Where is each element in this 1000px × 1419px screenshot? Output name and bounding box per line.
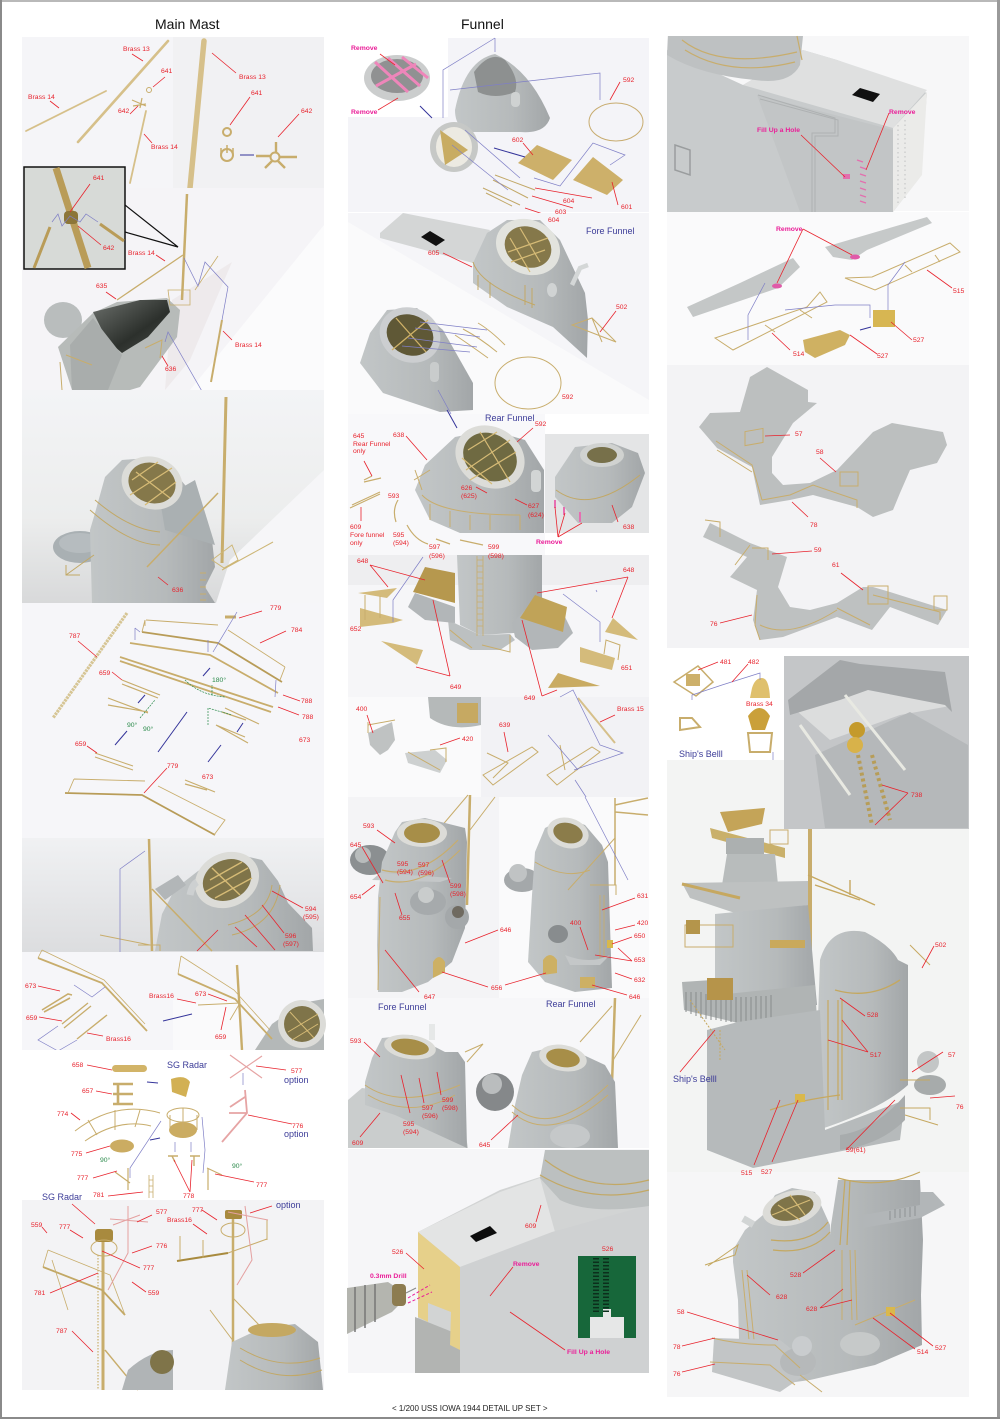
labels: Brass16	[167, 1217, 192, 1224]
labels: 599	[442, 1097, 454, 1104]
grey parts	[687, 217, 932, 317]
labels: 653	[634, 957, 646, 964]
labels: 609	[525, 1223, 537, 1230]
labels: Brass16	[106, 1036, 131, 1043]
labels: 788	[301, 698, 313, 705]
labels: 59	[814, 547, 822, 554]
brass grids	[715, 243, 960, 350]
labels: 400	[356, 706, 368, 713]
labels: Remove	[536, 539, 563, 546]
labels: 636	[165, 366, 177, 373]
labels: 625	[253, 952, 265, 959]
labels: (598)	[488, 553, 504, 560]
labels: 603	[555, 209, 567, 216]
labels: 593	[388, 493, 400, 500]
labels: Fore funnel	[350, 532, 385, 539]
labels: 592	[623, 77, 635, 84]
funnel and lower hull	[690, 931, 930, 1168]
labels: 626	[461, 485, 473, 492]
panel: masts complete	[22, 1192, 324, 1390]
funnel with rails	[414, 413, 544, 533]
labels: (598)	[442, 1105, 458, 1112]
labels: 651	[621, 665, 633, 672]
labels: 76	[673, 1371, 681, 1378]
labels: 559	[148, 1290, 160, 1297]
platform rails	[705, 428, 947, 640]
hull	[705, 1172, 945, 1392]
assembly arrows	[115, 612, 276, 762]
labels: 90°	[127, 721, 138, 729]
labels: 517	[870, 1052, 882, 1059]
brass plate 526	[418, 1232, 460, 1350]
tower	[682, 854, 875, 1023]
labels: 649	[524, 695, 536, 702]
funnel photo	[53, 397, 273, 603]
labels: 642	[301, 108, 313, 115]
panel: hull block with photo-etch and drill	[347, 1149, 649, 1373]
inset: mast detail: 641	[93, 175, 105, 182]
labels: 646	[500, 927, 512, 934]
upper platform	[699, 367, 947, 517]
labels: Fill Up a Hole	[567, 1349, 610, 1356]
labels: 514	[917, 1349, 929, 1356]
labels	[31, 1192, 301, 1335]
labels: 599	[488, 544, 500, 551]
brass platforms	[358, 567, 638, 688]
labels: Remove	[776, 226, 803, 233]
panel: tower and funnel assembled	[667, 760, 969, 1172]
panel: funnel rear assembled	[667, 1169, 969, 1397]
labels: 592	[562, 394, 574, 401]
labels: 515	[741, 1170, 753, 1177]
labels: SG Radar	[42, 1192, 82, 1202]
labels: 777	[256, 1182, 268, 1189]
labels: 657	[82, 1088, 94, 1095]
column	[408, 555, 573, 652]
labels: Brass 14	[151, 144, 178, 151]
labels: 654	[350, 894, 362, 901]
labels: (625)	[461, 493, 477, 500]
panel: rear funnel	[348, 410, 649, 555]
labels: 609	[352, 1140, 364, 1147]
labels: 777	[143, 1265, 155, 1272]
labels	[96, 250, 262, 373]
labels: 527	[877, 353, 889, 360]
labels: 595	[397, 861, 409, 868]
labels: 527	[913, 337, 925, 344]
brass stays	[38, 950, 272, 1050]
labels: 787	[69, 633, 81, 640]
panel: tower views	[348, 795, 649, 998]
labels	[350, 823, 649, 992]
labels: 594	[305, 906, 317, 913]
title: Main Mast: Main Mast	[155, 16, 220, 32]
labels: 526	[602, 1246, 614, 1253]
labels	[351, 45, 635, 211]
labels: 628	[806, 1306, 818, 1313]
labels: 61	[832, 562, 840, 569]
labels	[710, 431, 840, 628]
labels: 632	[634, 977, 646, 984]
brass grids	[483, 698, 615, 785]
lower platform	[703, 523, 947, 640]
labels: 774	[57, 1111, 69, 1118]
labels: 502	[616, 304, 628, 311]
panel: ship's bell parts	[667, 655, 842, 765]
labels: 673	[202, 774, 214, 781]
panel: platforms	[667, 365, 969, 648]
labels: 577	[156, 1209, 168, 1216]
labels: 639	[499, 722, 511, 729]
labels: Brass 13	[123, 46, 150, 53]
labels: 779	[167, 763, 179, 770]
labels: 659	[99, 670, 111, 677]
rear funnel model	[360, 297, 473, 412]
right mast	[177, 1206, 323, 1390]
labels: Fore Funnel	[378, 1002, 427, 1012]
labels: 593	[350, 1038, 362, 1045]
labels: 595	[403, 1121, 415, 1128]
labels: 645	[479, 1142, 491, 1149]
labels: 180°	[212, 676, 226, 684]
labels: 673	[195, 991, 207, 998]
labels: (5991)	[275, 961, 295, 968]
labels	[673, 1169, 947, 1378]
grey block	[667, 36, 927, 212]
labels: 642	[118, 108, 130, 115]
leaders	[50, 53, 299, 143]
labels	[679, 659, 773, 759]
labels: 527	[761, 1169, 773, 1176]
labels: 599	[450, 883, 462, 890]
labels: 400	[570, 920, 582, 927]
labels: 604	[563, 198, 575, 205]
labels: 595	[393, 532, 405, 539]
labels: 788	[302, 714, 314, 721]
labels: 648	[623, 567, 635, 574]
labels: 597	[429, 544, 441, 551]
labels: 777	[59, 1224, 71, 1231]
label 738: 738	[911, 792, 923, 799]
labels: Ship's Belll	[679, 749, 723, 759]
panel: brass mast parts	[22, 37, 324, 188]
panel: fore funnel	[348, 209, 649, 414]
labels: 673	[25, 983, 37, 990]
labels: 527	[935, 1345, 947, 1352]
second funnel	[555, 443, 645, 523]
labels: 76	[956, 1104, 964, 1111]
labels: Fill Up a Hole	[757, 127, 800, 134]
labels: (594)	[403, 1129, 419, 1136]
labels	[350, 994, 641, 1149]
labels: Brass 13	[239, 74, 266, 81]
labels	[28, 46, 313, 151]
labels: only	[353, 448, 366, 455]
funnel	[100, 839, 313, 951]
panel: SG radar parts	[22, 1050, 324, 1200]
labels: Remove	[351, 109, 378, 116]
labels: 648	[357, 558, 369, 565]
panel: mast etched parts	[22, 603, 324, 838]
labels: 597	[422, 1105, 434, 1112]
labels: 593	[363, 823, 375, 830]
hull block	[415, 1157, 649, 1373]
labels: 90°	[143, 725, 154, 733]
funnel on deck	[540, 1150, 649, 1209]
labels: (594)	[397, 869, 413, 876]
panel: funnel parts	[348, 38, 649, 218]
labels: (596)	[418, 870, 434, 877]
labels: (595)	[303, 914, 319, 921]
labels: 90°	[100, 1156, 111, 1164]
labels: 659	[215, 1034, 227, 1041]
inset: mast detail	[24, 167, 178, 269]
labels: 624	[192, 952, 204, 959]
labels: 781	[34, 1290, 46, 1297]
labels: SG Radar	[167, 1060, 207, 1070]
labels: 777	[192, 1207, 204, 1214]
labels: (596)	[422, 1113, 438, 1120]
labels: 76	[710, 621, 718, 628]
labels: 420	[462, 736, 474, 743]
labels: 641	[161, 68, 173, 75]
labels: 778	[183, 1193, 195, 1200]
labels: 515	[953, 288, 965, 295]
panel: fore and rear funnel finished	[348, 994, 649, 1149]
labels: Rear Funnel	[353, 441, 391, 448]
labels: 779	[270, 605, 282, 612]
labels: Brass 15	[617, 706, 644, 713]
labels	[757, 109, 916, 134]
labels: 526	[392, 1249, 404, 1256]
labels: 602	[512, 137, 524, 144]
labels: 787	[56, 1328, 68, 1335]
panel: funnel base platforms	[348, 544, 649, 697]
labels: Remove	[351, 45, 378, 52]
left tower	[350, 795, 495, 992]
panel: funnel photo with rails	[22, 838, 324, 987]
labels: 652	[350, 626, 362, 633]
labels: 0.3mm Drill	[370, 1273, 407, 1280]
labels: 605	[428, 250, 440, 257]
brass rods	[26, 41, 204, 188]
title: Funnel: Funnel	[461, 16, 504, 32]
labels: Rear Funnel	[485, 413, 535, 423]
panel: funnel with mast	[22, 390, 324, 603]
labels: Fore Funnel	[586, 226, 635, 236]
labels: Rear Funnel	[546, 999, 596, 1009]
labels: 596	[285, 933, 297, 940]
labels: 598	[275, 952, 287, 959]
labels: 641	[251, 90, 263, 97]
labels: 57	[795, 431, 803, 438]
etched parts 641 and 642	[132, 88, 297, 168]
footer caption: < 1/200 USS IOWA 1944 DETAIL UP SET >	[392, 1404, 548, 1413]
funnel crop	[255, 999, 326, 1050]
rear funnel	[476, 998, 641, 1148]
labels	[350, 544, 635, 691]
etched brass assemblies	[53, 613, 285, 835]
labels: 528	[790, 1272, 802, 1279]
labels: 655	[399, 915, 411, 922]
inset: mast detail: 642	[103, 245, 115, 252]
panel: parts 400, 420, 639 and Brass 15	[348, 690, 649, 800]
labels: (598)	[450, 891, 466, 898]
right tower	[504, 798, 648, 992]
labels: 604	[548, 217, 560, 224]
ring and brass plates	[430, 103, 643, 206]
labels: (627)	[190, 960, 206, 967]
labels: (594)	[393, 540, 409, 547]
labels: 58	[677, 1309, 685, 1316]
labels: 57	[948, 1052, 956, 1059]
labels: 650	[634, 933, 646, 940]
labels: only	[350, 540, 363, 547]
labels: 638	[393, 432, 405, 439]
labels	[428, 209, 635, 401]
small platforms	[368, 720, 447, 773]
labels: (597)	[283, 941, 299, 948]
labels: 635	[96, 283, 108, 290]
grey block	[428, 697, 481, 727]
labels: Brass 14	[128, 250, 155, 257]
labels: 592	[535, 421, 547, 428]
panel: superstructure top view	[667, 36, 969, 212]
labels: Remove	[513, 1261, 540, 1268]
labels: 673	[299, 737, 311, 744]
labels	[25, 983, 227, 1043]
labels: 645	[353, 433, 365, 440]
labels: 601	[621, 204, 633, 211]
labels	[673, 942, 964, 1154]
labels: 784	[291, 627, 303, 634]
funnel	[455, 54, 550, 132]
radar director	[710, 808, 788, 858]
labels: 631	[637, 893, 649, 900]
labels	[57, 1060, 309, 1200]
labels: 646	[629, 994, 641, 1001]
label 636: 636	[172, 587, 184, 594]
labels: Remove	[889, 109, 916, 116]
radar etched parts	[75, 1065, 222, 1198]
labels: 638	[623, 524, 635, 531]
zoom inset: ship's bell under platform	[784, 656, 969, 829]
labels: 656	[491, 985, 503, 992]
pin drill	[347, 1282, 416, 1334]
labels: 78	[673, 1344, 681, 1351]
labels: 775	[71, 1151, 83, 1158]
left mast	[43, 1206, 174, 1390]
panel: grey parts with brass grids	[667, 212, 969, 365]
labels: option	[284, 1075, 309, 1085]
fore funnel model	[473, 209, 616, 358]
labels: 90°	[232, 1162, 243, 1170]
labels: 777	[77, 1175, 89, 1182]
labels	[776, 226, 965, 360]
labels: Brass 14	[28, 94, 55, 101]
labels: 597	[418, 862, 430, 869]
labels: 420	[637, 920, 649, 927]
labels: Brass 34	[746, 701, 773, 708]
labels: 559	[31, 1222, 43, 1229]
labels: 609	[350, 524, 362, 531]
panel: mast assembly steps	[22, 950, 326, 1051]
labels: 659	[26, 1015, 38, 1022]
labels: 514	[793, 351, 805, 358]
labels: 628	[776, 1294, 788, 1301]
labels	[350, 413, 635, 547]
labels: 502	[935, 942, 947, 949]
labels: 645	[350, 842, 362, 849]
labels: (596)	[429, 553, 445, 560]
labels: 58	[816, 449, 824, 456]
labels: 577	[291, 1068, 303, 1075]
loose brass	[455, 323, 561, 409]
fore funnel	[348, 1024, 483, 1148]
mast	[808, 828, 812, 1000]
labels: 482	[748, 659, 760, 666]
labels: Brass16	[149, 993, 174, 1000]
funnel rear view	[44, 298, 180, 390]
panel: mast on funnel	[22, 188, 324, 400]
labels: (624)	[528, 512, 544, 519]
labels: (626)	[252, 961, 268, 968]
labels: 649	[450, 684, 462, 691]
labels	[190, 906, 319, 968]
labels	[370, 1223, 614, 1356]
labels: 481	[720, 659, 732, 666]
side deck and figure	[900, 1051, 946, 1125]
labels: 78	[810, 522, 818, 529]
green fret 526	[578, 1256, 636, 1338]
pink ring	[364, 55, 430, 101]
mast and stay rods	[60, 194, 222, 390]
labels: option	[276, 1200, 301, 1210]
labels: Ship's Belll	[673, 1074, 717, 1084]
labels	[69, 605, 314, 781]
labels: Brass 14	[235, 342, 262, 349]
deck plate	[380, 213, 490, 263]
labels: 647	[424, 994, 436, 1001]
labels: 59(61)	[846, 1147, 866, 1154]
labels	[356, 695, 644, 743]
labels: 776	[156, 1243, 168, 1250]
labels: 658	[72, 1062, 84, 1069]
option mast in pink	[222, 1055, 262, 1142]
labels: 659	[75, 741, 87, 748]
loose parts	[350, 476, 483, 545]
labels: 528	[867, 1012, 879, 1019]
labels: 776	[292, 1123, 304, 1130]
bell parts	[674, 666, 772, 752]
labels: 627	[528, 503, 540, 510]
labels: 781	[93, 1192, 105, 1199]
labels: option	[284, 1129, 309, 1139]
